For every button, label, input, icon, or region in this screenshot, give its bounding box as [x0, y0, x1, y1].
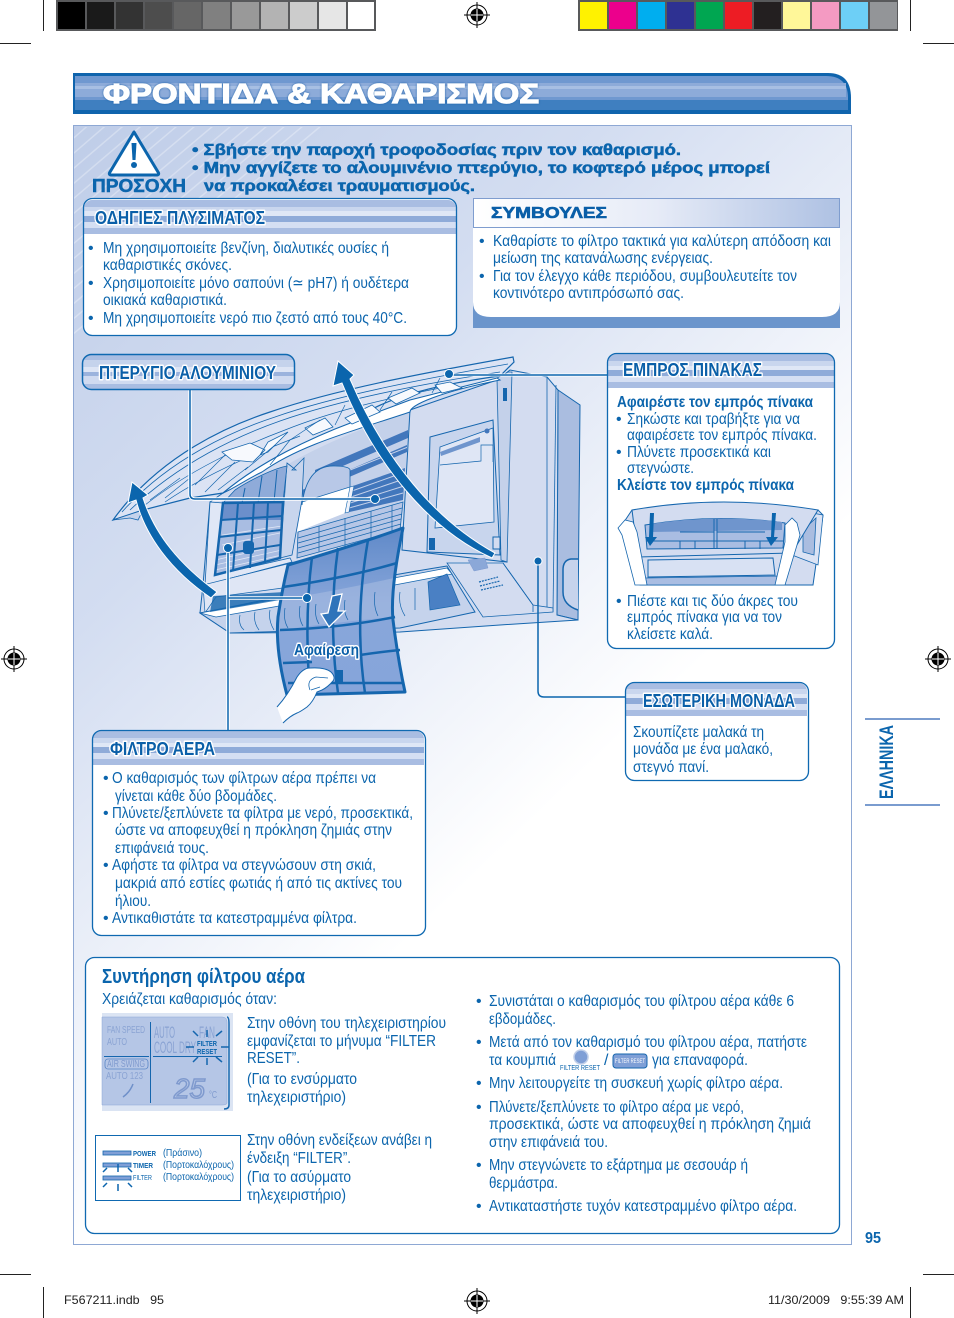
remote control display: °C	[209, 1090, 217, 1101]
right list: •	[476, 1034, 482, 1051]
panel: air filter	[92, 730, 426, 936]
label: aluminium fin	[82, 354, 295, 390]
hands	[618, 520, 647, 585]
text	[633, 724, 773, 776]
leader line: aluminium fin	[190, 390, 380, 504]
remote text: εμφανίζεται το μήνυμα “FILTER	[247, 1033, 436, 1050]
right list: τα κουμπιά	[489, 1052, 556, 1069]
right list: Συνιστάται ο καθαρισμός του φίλτρου αέρα κάθε 6	[489, 993, 794, 1010]
arrow: panel lift right	[333, 361, 495, 558]
right list: προσεκτικά, ώστε να αποφευχθεί η πρόκληση ζημιά	[489, 1116, 811, 1133]
registration mark right	[925, 646, 951, 672]
right list: Αντικαταστήστε τυχόν κατεστραμμένο φίλτρο αέρα.	[489, 1198, 797, 1215]
small louvre row	[297, 502, 403, 558]
label: removal: Αφαίρεση	[294, 642, 359, 659]
list: Πλύνετε/ξεπλύνετε τα φίλτρα με νερό, προσεκτικά,	[112, 805, 413, 822]
instructions: αφαιρέσετε τον εμπρός πίνακα.	[627, 427, 817, 444]
instructions: •	[616, 411, 622, 428]
central column	[280, 458, 304, 558]
removed air filter	[277, 528, 405, 695]
heading: ΟΔΗΓΙΕΣ ΠΛΥΣΙΜΑΤΟΣ	[95, 208, 265, 228]
heading: ΦΙΛΤΡΟ ΑΕΡΑ	[110, 739, 215, 759]
list: Για τον έλεγχο κάθε περιόδου, συμβουλευτείτε τον	[493, 268, 797, 285]
leader line: air filter	[224, 544, 312, 730]
instructions after picture: εμπρός πίνακα για να τον	[627, 609, 782, 626]
illustration: closing the panel	[618, 502, 823, 585]
instructions: •	[616, 444, 622, 461]
unit body	[200, 370, 578, 633]
printer colour bar: process colours	[578, 0, 898, 31]
list: κοντινότερο αντιπρόσωπό σας.	[493, 285, 684, 302]
title banner: ΦΡΟΝΤΙΔΑ & ΚΑΘΑΡΙΣΜΟΣ	[103, 78, 539, 109]
indicator display: POWER	[133, 1151, 156, 1158]
list: ήλιου.	[115, 893, 151, 910]
indicator text: ένδειξη “FILTER”.	[247, 1150, 351, 1167]
remote control display: 25	[173, 1073, 205, 1104]
list: Καθαρίστε το φίλτρο τακτικά για καλύτερη απόδοση και	[493, 233, 831, 250]
right list: •	[476, 1157, 482, 1174]
hand holding the filter	[277, 668, 343, 723]
indicator text: τηλεχειριστήριο)	[247, 1187, 346, 1204]
list	[88, 240, 409, 327]
interior with heat exchanger	[223, 412, 410, 558]
instructions after picture: κλείσετε καλά.	[627, 626, 713, 643]
white crescent under mesh	[223, 378, 500, 493]
side tab: language: ΕΛΛΗΝΙΚΑ	[877, 725, 898, 799]
remote control display: FAN SPEED	[107, 1025, 145, 1036]
instructions after picture: •	[616, 593, 622, 610]
icon: warning triangle	[109, 132, 159, 175]
registration mark left	[1, 646, 27, 672]
right list	[476, 993, 811, 1215]
indicator display: (Πορτοκαλόχρους)	[163, 1159, 234, 1171]
indicator display: FILTER	[133, 1175, 152, 1182]
registration mark bottom	[464, 1288, 490, 1314]
main panel background	[74, 126, 852, 1244]
registration mark top	[464, 2, 490, 28]
remote control display: AIR SWING	[107, 1059, 145, 1070]
list: ώστε να αποφευχθεί η πρόκληση ζημιάς στην	[115, 822, 392, 839]
list: •	[479, 268, 485, 285]
heading: ΕΜΠΡΟΣ ΠΙΝΑΚΑΣ	[623, 360, 762, 380]
list: μακριά από εστίες φωτιάς ή από τις ακτίνες του	[115, 875, 402, 892]
panel: front panel	[607, 353, 835, 648]
caution text: • Σβήστε την παροχή τροφοδοσίας πριν τον καθαρισμό.	[192, 142, 681, 159]
panel: washing instructions	[84, 198, 456, 336]
indicator display	[96, 1136, 240, 1200]
arrows	[645, 513, 657, 546]
list: Αντικαθιστάτε τα κατεστραμμένα φίλτρα.	[112, 910, 357, 927]
instructions after picture: Πιέστε και τις δύο άκρες του	[627, 593, 798, 610]
caution text	[192, 142, 770, 195]
instructions: Σηκώστε και τραβήξτε για να	[627, 411, 800, 428]
illustration: air conditioner indoor unit with panel open	[113, 357, 580, 723]
list: επιφάνειά τους.	[115, 840, 209, 857]
subheading: Χρειάζεται καθαρισμός όταν:	[102, 991, 277, 1008]
indicator text	[247, 1132, 432, 1204]
instructions after picture	[616, 593, 798, 643]
filter recess opening	[297, 487, 350, 532]
right compartment	[402, 372, 556, 612]
list: •	[103, 805, 109, 822]
arrow: panel lift left	[128, 482, 217, 598]
print slug: file name: F567211.indb 95	[64, 1293, 164, 1307]
right list: •	[476, 1075, 482, 1092]
right list: •	[476, 993, 482, 1010]
heading: ΣΥΜΒΟΥΛΕΣ	[491, 205, 607, 222]
caution text: • Μην αγγίζετε το αλουμινένιο πτερύγιο, το κοφτερό μέρος μπορεί	[192, 160, 770, 177]
panel: tips	[473, 198, 840, 328]
raised front panel	[113, 357, 514, 520]
caution text: να προκαλέσει τραυματισμούς.	[204, 178, 475, 195]
list: Μη χρησιμοποιείτε βενζίνη, διαλυτικές ουσίες ή	[103, 240, 389, 257]
list	[103, 770, 413, 927]
right list: /	[604, 1052, 609, 1069]
instructions: Κλείστε τον εμπρός πίνακα	[617, 477, 794, 494]
remote control display: AUTO	[107, 1037, 127, 1048]
remote control display	[102, 1013, 233, 1111]
instructions	[616, 394, 817, 494]
list: οικιακά καθαριστικά.	[103, 292, 227, 309]
body	[622, 510, 823, 585]
side tab: language	[865, 719, 940, 805]
printer colour bar: greyscale	[56, 0, 376, 31]
list: Αφήστε τα φίλτρα να στεγνώσουν στη σκιά,	[112, 857, 376, 874]
remote text: τηλεχειριστήριο)	[247, 1089, 346, 1106]
upper left filter arcs	[223, 466, 287, 503]
right list: θερμάστρα.	[489, 1175, 558, 1192]
list: γίνεται κάθε δύο βδομάδες.	[115, 788, 277, 805]
leader line: front panel	[444, 370, 607, 378]
list	[479, 233, 831, 302]
instructions: στεγνώστε.	[627, 460, 694, 477]
right list: στην επιφάνειά του.	[489, 1134, 608, 1151]
list: •	[479, 233, 485, 250]
heading: ΕΣΩΤΕΡΙΚΗ ΜΟΝΑΔΑ	[643, 691, 795, 711]
remote text: RESET”.	[247, 1050, 300, 1067]
remote control display: AUTO 123	[106, 1071, 143, 1082]
heading: Συντήρηση φίλτρου αέρα	[102, 966, 306, 988]
leader line: indoor unit	[534, 557, 625, 697]
panel: air filter maintenance	[86, 958, 840, 1234]
right list: •	[476, 1198, 482, 1215]
right list: Μετά από τον καθαρισμό του φίλτρου αέρα, πατήστε	[489, 1034, 807, 1051]
right list: Μην λειτουργείτε τη συσκευή χωρίς φίλτρο αέρα.	[489, 1075, 783, 1092]
list: •	[103, 857, 109, 874]
remote text: Στην οθόνη του τηλεχειριστηρίου	[247, 1015, 446, 1032]
remote control display: FAN	[199, 1023, 215, 1042]
text: Σκουπίζετε μαλακά τη	[633, 724, 764, 741]
panel window	[645, 518, 785, 549]
right list: εβδομάδες.	[489, 1011, 556, 1028]
label: aluminium fin: ΠΤΕΡΥΓΙΟ ΑΛΟΥΜΙΝΙΟΥ	[99, 363, 276, 383]
list: •	[103, 770, 109, 787]
page number: 95	[865, 1230, 881, 1247]
indicator display: TIMER	[133, 1163, 153, 1170]
list: Ο καθαρισμός των φίλτρων αέρα πρέπει να	[112, 770, 376, 787]
right list: •	[476, 1099, 482, 1116]
right list: FILTER RESET	[560, 1065, 601, 1072]
remote control display: AUTO	[154, 1023, 175, 1042]
list: μείωση της κατανάλωσης ενέργειας.	[493, 250, 713, 267]
remote control display: COOL DRY	[154, 1038, 196, 1057]
print slug: date: 11/30/2009 9:55:39 AM	[768, 1293, 904, 1307]
arrow: down removal	[321, 594, 345, 627]
unit side	[557, 390, 580, 620]
remote control display: FILTER	[197, 1041, 217, 1048]
title banner	[73, 73, 851, 114]
front panel	[632, 502, 818, 557]
list: •	[88, 240, 94, 257]
text: στεγνό πανί.	[633, 759, 709, 776]
right list: για επαναφορά.	[652, 1052, 748, 1069]
list: Μη χρησιμοποιείτε νερό πιο ζεστό από τους 40°C.	[103, 310, 407, 327]
caution block	[92, 132, 770, 196]
remote text: (Για το ενσύρματο	[247, 1071, 357, 1088]
indicator display: (Πράσινο)	[163, 1147, 202, 1159]
right list: Πλύνετε/ξεπλύνετε το φίλτρο αέρα με νερό,	[489, 1099, 744, 1116]
caution label: ΠΡΟΣΟΧΗ	[92, 176, 186, 196]
instructions: Πλύνετε προσεκτικά και	[627, 444, 771, 461]
indicator text: Στην οθόνη ενδείξεων ανάβει η	[247, 1132, 432, 1149]
panel: indoor unit	[625, 682, 809, 780]
left filter in place	[205, 500, 292, 585]
list: •	[88, 310, 94, 327]
list: •	[88, 275, 94, 292]
instructions: Αφαιρέστε τον εμπρός πίνακα	[617, 394, 813, 411]
remote text	[247, 1015, 446, 1106]
right list: Μην στεγνώνετε το εξάρτημα με σεσουάρ ή	[489, 1157, 748, 1174]
indicator text: (Για το ασύρματο	[247, 1169, 351, 1186]
right list: FILTER RESET	[615, 1059, 645, 1065]
indicator display: (Πορτοκαλόχρους)	[163, 1171, 234, 1183]
list: καθαριστικές σκόνες.	[103, 257, 232, 274]
list: •	[103, 910, 109, 927]
text: μονάδα με ένα μαλακό,	[633, 741, 773, 758]
list: Χρησιμοποιείτε μόνο σαπούνι (≃ pH7) ή ουδέτερα	[103, 275, 409, 292]
lower louvre	[200, 558, 553, 633]
remote control display: RESET	[197, 1049, 218, 1056]
